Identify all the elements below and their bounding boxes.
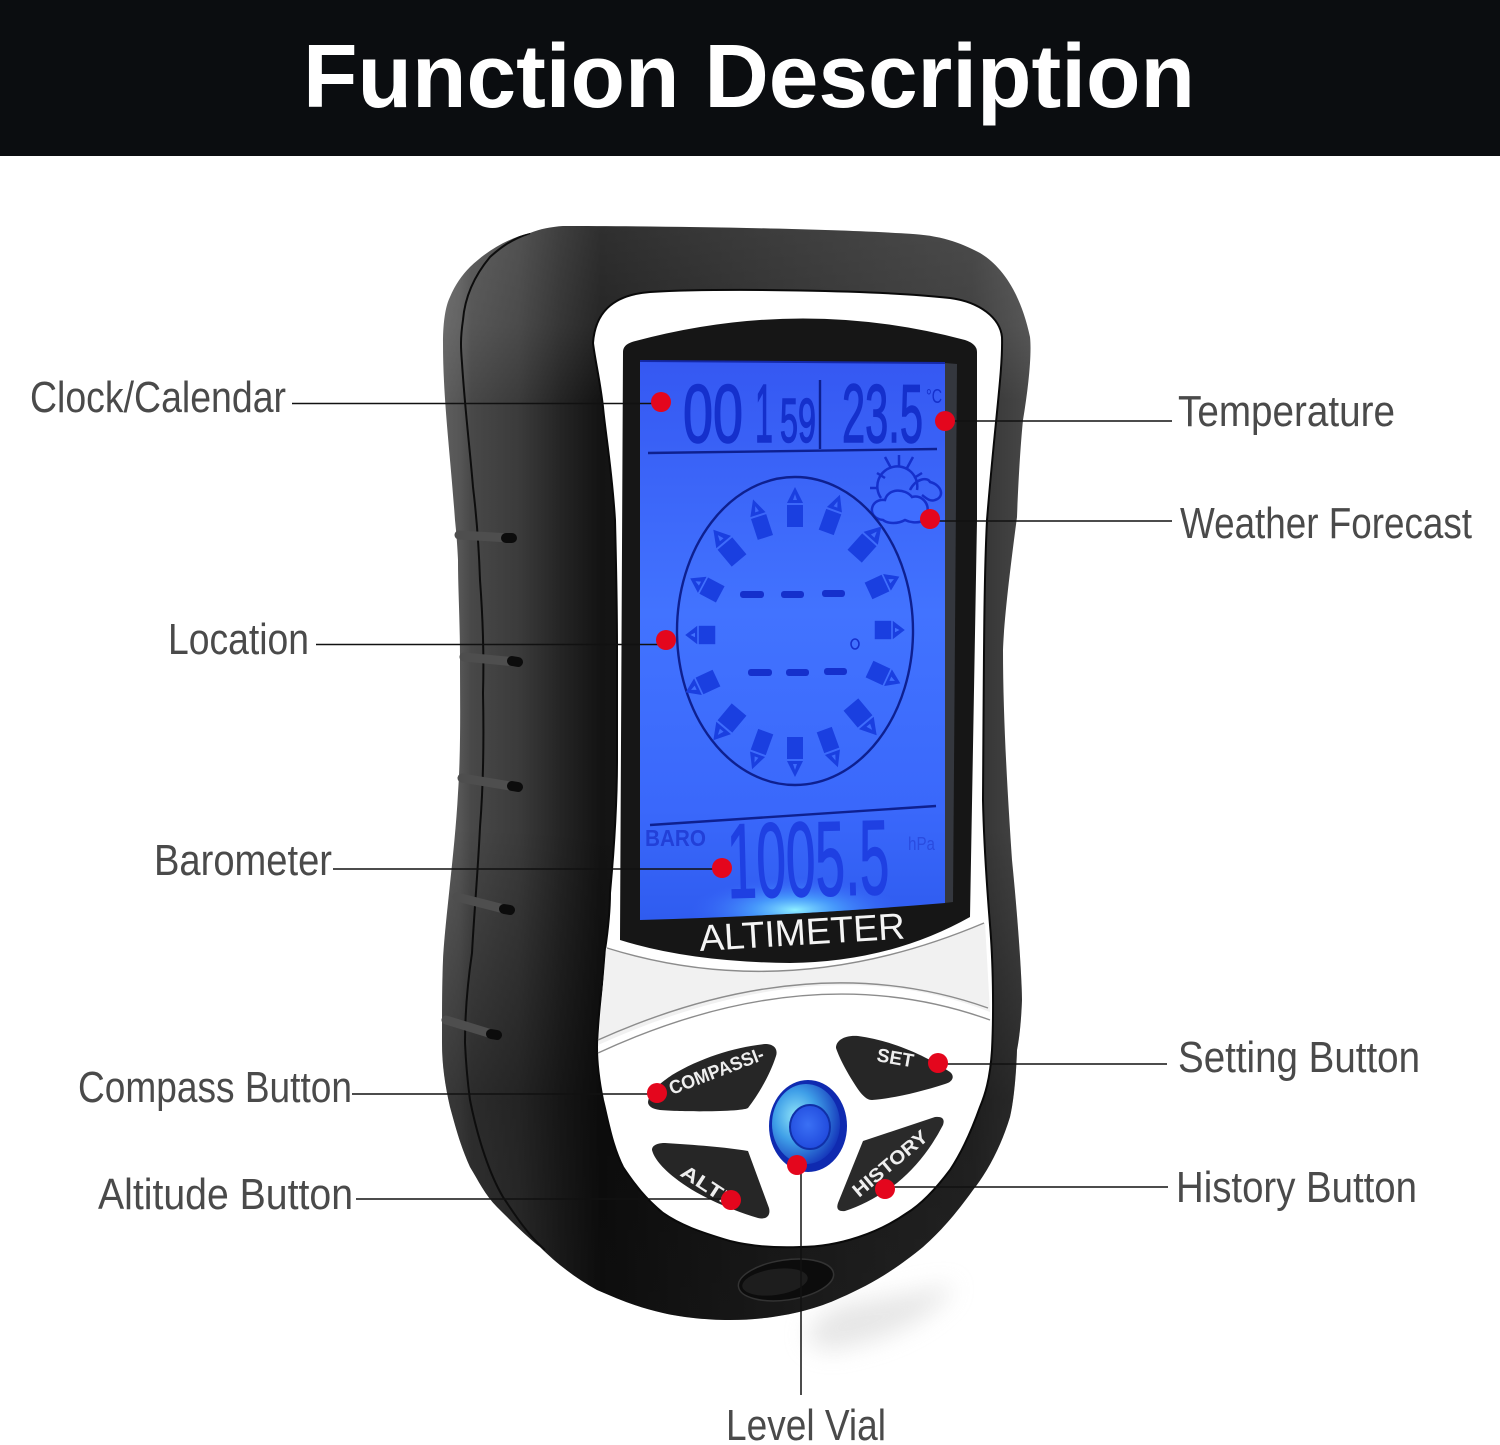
history button: HISTORY bbox=[849, 1126, 933, 1202]
time readout: 1 bbox=[755, 367, 773, 460]
callout: barometer bbox=[154, 836, 732, 885]
screen bezel bbox=[620, 318, 977, 963]
callout: temperature bbox=[935, 387, 1395, 436]
device body bbox=[442, 226, 1031, 1320]
compass direction pointers bbox=[682, 487, 905, 777]
callout: location: Location bbox=[168, 615, 309, 664]
silver band outlines bbox=[598, 923, 990, 1053]
hPa label: hPa bbox=[908, 834, 936, 854]
callout: temperature: Temperature bbox=[1178, 387, 1395, 436]
dial dashes bbox=[740, 590, 847, 676]
white faceplate bbox=[593, 290, 1002, 1247]
temperature readout bbox=[842, 367, 942, 460]
ground shadow bbox=[807, 1285, 955, 1350]
callout: history button bbox=[875, 1163, 1417, 1212]
left grip ridges bbox=[446, 535, 518, 1035]
title: Function Description bbox=[303, 27, 1195, 127]
set button bbox=[836, 1036, 953, 1100]
level vial knob bbox=[769, 1080, 847, 1172]
silver band bbox=[598, 923, 990, 1045]
temperature readout: °C bbox=[926, 386, 942, 408]
callout: clock/calendar bbox=[30, 373, 671, 422]
compass button: COMPASSI- bbox=[666, 1044, 767, 1100]
time readout: 59 bbox=[780, 387, 816, 456]
title banner bbox=[0, 0, 1500, 156]
BARO label: BARO bbox=[645, 825, 706, 851]
barometer readout: 1005.5 bbox=[725, 799, 891, 921]
callout: weather forecast bbox=[920, 499, 1472, 548]
callout: setting button: Setting Button bbox=[1178, 1033, 1420, 1082]
callout: compass button bbox=[78, 1063, 667, 1112]
screen bottom glow bbox=[706, 885, 886, 918]
degree mark bbox=[851, 639, 859, 649]
callout: history button: History Button bbox=[1176, 1163, 1417, 1212]
set button: SET bbox=[875, 1045, 916, 1072]
callout: altitude button: Altitude Button bbox=[98, 1170, 353, 1219]
callout: location bbox=[168, 615, 676, 664]
callout: setting button bbox=[928, 1033, 1420, 1082]
time readout: 00 bbox=[683, 367, 743, 460]
callout: barometer: Barometer bbox=[154, 836, 332, 885]
compass dial bbox=[677, 477, 913, 785]
time readout bbox=[683, 367, 816, 460]
icon: weather sun and clouds bbox=[870, 455, 941, 523]
callout: level vial bbox=[726, 1155, 886, 1445]
compass button bbox=[648, 1044, 777, 1111]
history button bbox=[837, 1117, 944, 1211]
lanyard slot bbox=[736, 1254, 836, 1306]
altitude button: ALTI/ bbox=[676, 1162, 739, 1212]
blue LCD screen bbox=[640, 361, 957, 942]
temperature readout: 23.5 bbox=[842, 367, 923, 460]
callout: clock/calendar: Clock/Calendar bbox=[30, 373, 286, 422]
altitude button bbox=[652, 1143, 769, 1219]
callout: altitude button bbox=[98, 1170, 741, 1219]
body seam line bbox=[461, 233, 545, 1250]
ALTIMETER brand text: ALTIMETER bbox=[698, 905, 906, 959]
LCD divider lines bbox=[648, 380, 937, 825]
callout: compass button: Compass Button bbox=[78, 1063, 352, 1112]
product photo: handheld altimeter device bbox=[442, 226, 1031, 1350]
